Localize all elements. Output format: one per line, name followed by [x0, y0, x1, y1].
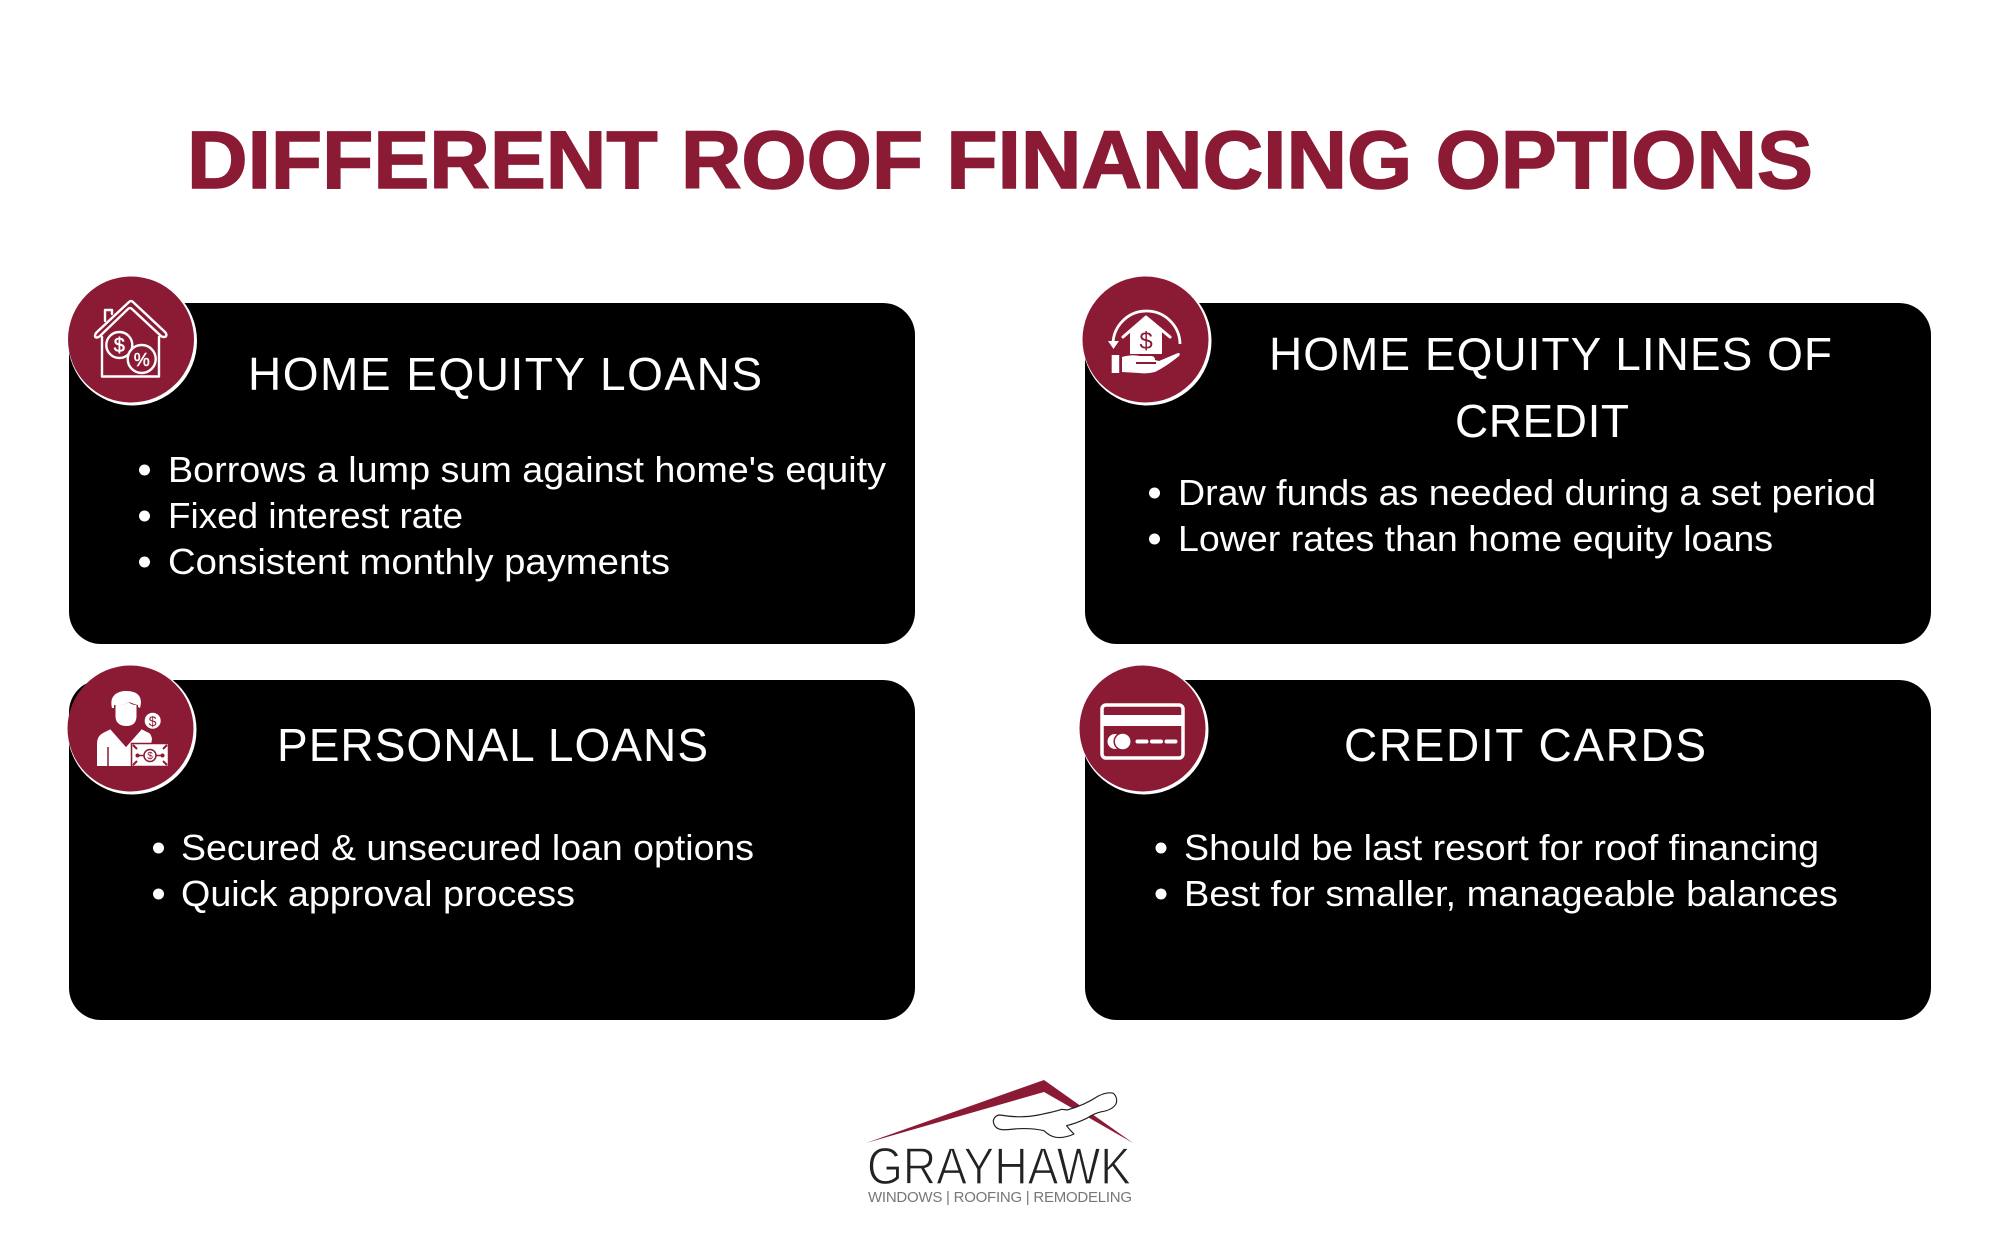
bullet list: credit cards	[1156, 827, 1838, 914]
panel: credit cards	[1080, 666, 1931, 1020]
logo tagline: WINDOWS | ROOFING | REMODELING	[868, 1189, 1132, 1206]
heading: home equity lines of credit: HOME EQUITY LINES OF	[1269, 328, 1832, 380]
bullet list: home equity loans: Borrows a lump sum against home's equity	[168, 449, 886, 490]
panel: home equity loans	[68, 276, 915, 644]
bullet list: home equity lines of credit	[1149, 472, 1876, 559]
panel: personal loans	[68, 666, 915, 1020]
bullet list: personal loans: Quick approval process	[181, 873, 575, 914]
icon: person with money: $	[149, 713, 157, 729]
title: DIFFERENT ROOF FINANCING OPTIONS	[187, 115, 1813, 206]
icon: house with dollar and percent coins: %	[134, 350, 150, 370]
icon: hand holding house with dollar	[1082, 276, 1212, 406]
heading: home equity lines of credit	[1269, 328, 1832, 447]
bullet list: home equity loans: Consistent monthly payments	[168, 541, 670, 582]
bullet list: home equity lines of credit: Draw funds as needed during a set period	[1178, 472, 1876, 513]
bullet list: home equity lines of credit: Lower rates than home equity loans	[1178, 518, 1773, 559]
icon: person with money: $	[147, 751, 153, 762]
bullet list: credit cards: Best for smaller, manageable balances	[1184, 873, 1838, 914]
logo: Grayhawk	[866, 1080, 1133, 1206]
icon: house with dollar and percent coins	[68, 276, 197, 406]
heading: credit cards: CREDIT CARDS	[1344, 719, 1706, 771]
bullet list: home equity loans	[139, 449, 886, 582]
bullet list: home equity loans: Fixed interest rate	[168, 495, 463, 536]
heading: home equity loans: HOME EQUITY LOANS	[248, 348, 762, 400]
logo roof	[866, 1080, 1133, 1143]
icon: person with money	[68, 666, 196, 794]
icon: hand holding house with dollar: $	[1139, 328, 1153, 355]
bullet list: personal loans: Secured & unsecured loan options	[181, 827, 754, 868]
bullet list: personal loans	[153, 827, 754, 914]
icon: credit card	[1080, 666, 1208, 794]
logo hawk	[993, 1093, 1117, 1137]
heading: home equity lines of credit: CREDIT	[1455, 395, 1629, 447]
icon: house with dollar and percent coins: $	[114, 335, 125, 357]
panel: home equity lines of credit	[1082, 276, 1931, 644]
logo wordmark: GRAYHAWK	[867, 1138, 1131, 1196]
heading: personal loans: PERSONAL LOANS	[277, 719, 708, 771]
bullet list: credit cards: Should be last resort for roof financing	[1184, 827, 1819, 868]
